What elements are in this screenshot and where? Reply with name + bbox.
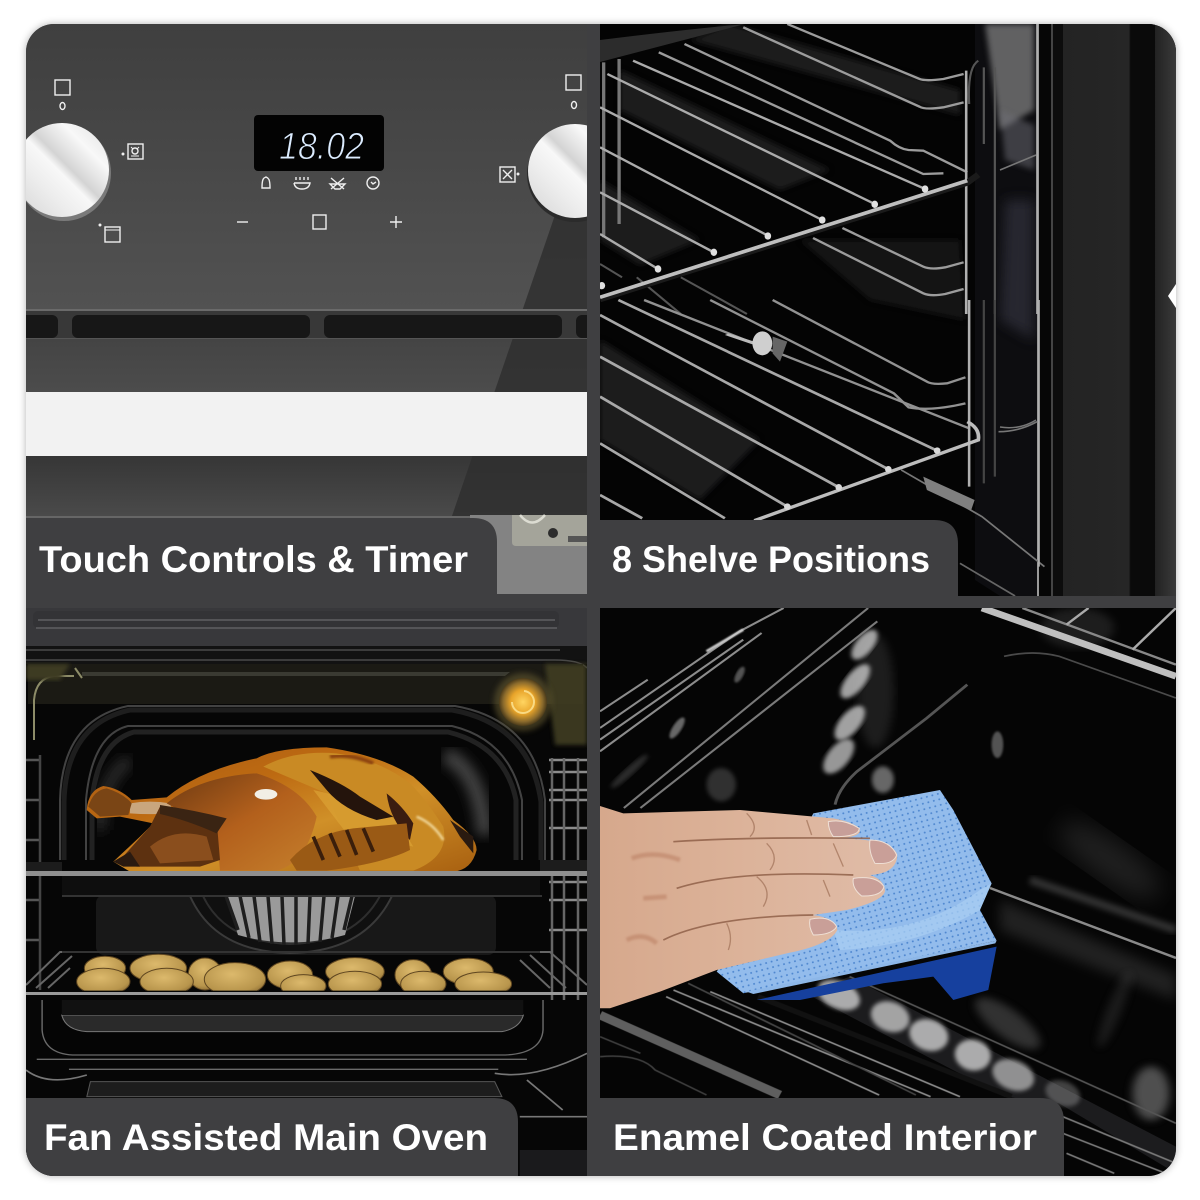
control strip: slots [10, 309, 606, 339]
label tab: enamel coated interior [587, 1098, 1064, 1176]
top shelf wire [982, 608, 1176, 676]
left knob [26, 123, 111, 221]
white door handle [26, 392, 587, 456]
fan cover arches [60, 706, 545, 860]
upper oven rack [26, 871, 587, 896]
label text: enamel coated interior: Enamel Coated Interior [613, 1117, 1037, 1158]
upper rack front bar [600, 175, 978, 299]
label text: 8 shelf positions: 8 Shelve Positions [612, 539, 930, 580]
roast potatoes [76, 954, 512, 991]
label text: fan assisted main oven: Fan Assisted Main Oven [44, 1117, 488, 1158]
rear panel behind fan [96, 895, 496, 955]
hand wiping [600, 806, 897, 1008]
roast turkey [87, 747, 477, 872]
thermostat probe [725, 331, 787, 362]
cavity side wall [975, 24, 1038, 596]
right knob [527, 124, 587, 222]
lower tray and door seal [26, 1000, 587, 1177]
oven door top lip [26, 608, 587, 668]
lower oven rack [26, 992, 587, 995]
diagonal glass reflection [452, 205, 587, 516]
cavity edges upper [600, 608, 1176, 808]
panel: enamel coated interior [600, 608, 1176, 1176]
enamel back wall bands [600, 24, 965, 500]
label tab: fan assisted main oven [26, 1098, 518, 1176]
label text: touch controls and timer: Touch Controls & Timer [39, 539, 468, 580]
rating plate area [470, 515, 587, 594]
left vertical runner [604, 59, 619, 237]
panel: touch controls and timer [10, 24, 623, 594]
top beam [600, 24, 745, 62]
fan grille [190, 896, 392, 953]
right wall reflections [990, 809, 1176, 1000]
lower rack mesh [26, 952, 587, 988]
display reading: 18.02 [279, 126, 364, 168]
side shelf runners [26, 755, 587, 1000]
oven door frame [1037, 24, 1176, 596]
panel: fan assisted main oven [26, 608, 587, 1177]
upper enamel reflections [608, 608, 1114, 801]
blue cloth [717, 790, 997, 1000]
cavity roof [28, 664, 583, 704]
shelf runners and upper rack wires [599, 24, 1037, 314]
timer display [254, 115, 384, 171]
lower rack wires [600, 300, 1044, 596]
oven lamp [494, 673, 552, 731]
control icons [55, 75, 581, 242]
label tab: touch controls and timer [26, 518, 497, 596]
floor strip with reflections [600, 970, 1176, 1173]
upper rack back rail [26, 860, 587, 871]
label tab: 8 shelf positions [600, 520, 958, 596]
panel: 8 shelf positions [599, 24, 1176, 596]
